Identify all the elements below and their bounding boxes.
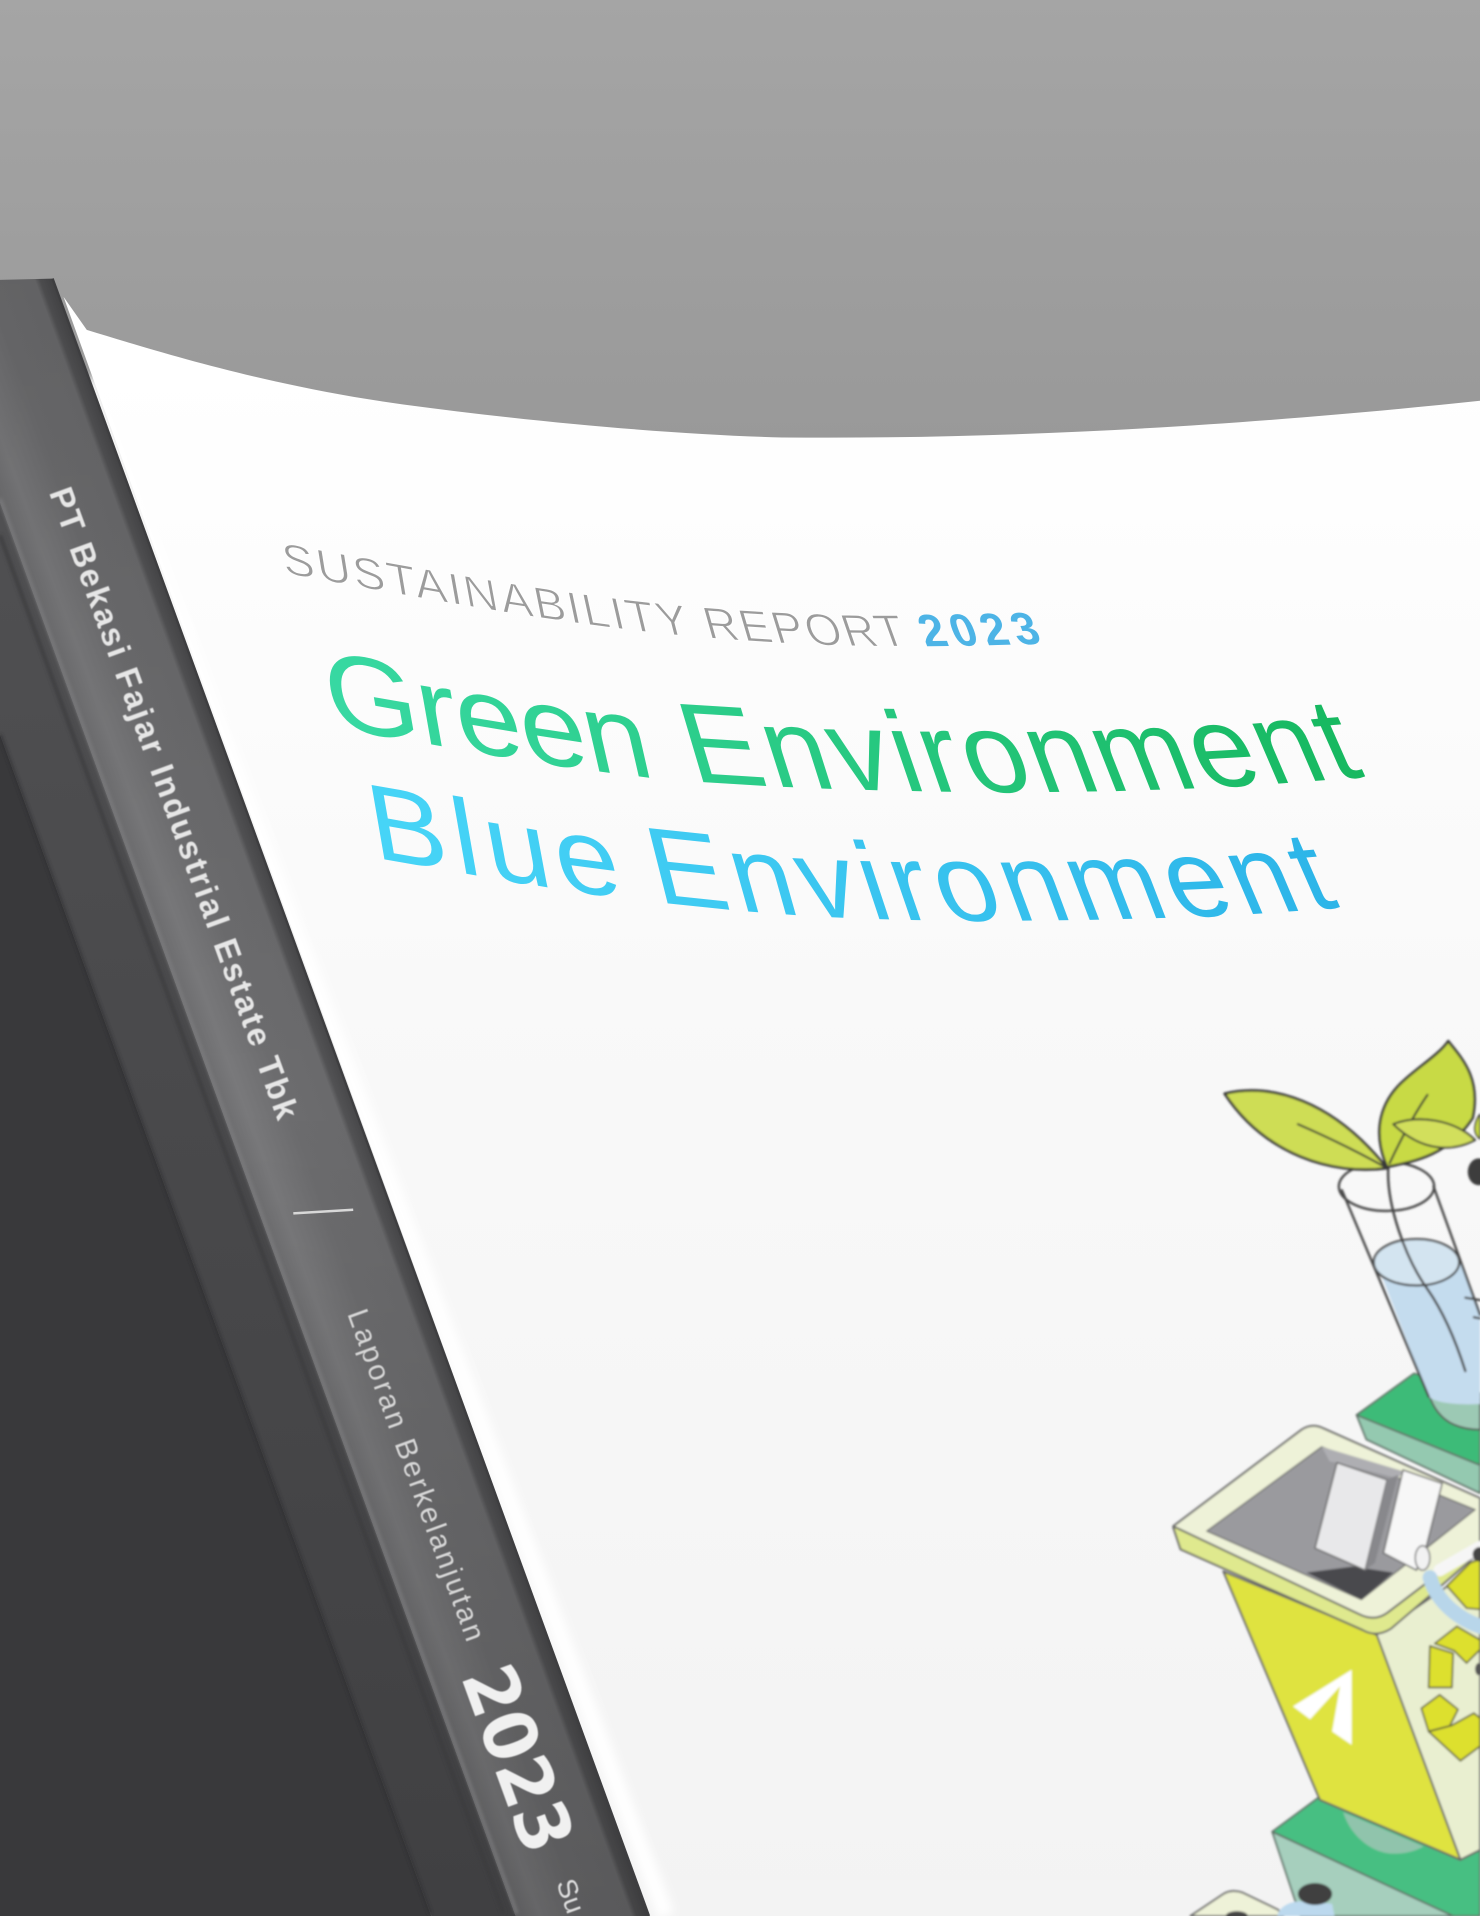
spine edge line bbox=[53, 279, 649, 1916]
paper sheet one bbox=[1315, 1463, 1387, 1570]
left leaf vein bbox=[1298, 1124, 1387, 1168]
right leaf bbox=[1379, 1041, 1475, 1167]
bottle body bbox=[1277, 1901, 1335, 1916]
subtitle: SUSTAINABILITY REPORT 2023 bbox=[285, 545, 1040, 646]
hinge far line bbox=[0, 734, 430, 1914]
spine year: 2023 bbox=[444, 1654, 590, 1864]
beaker ticks bbox=[1465, 1298, 1480, 1318]
beaker base bbox=[1429, 1393, 1480, 1430]
small lower bin bbox=[1190, 1883, 1335, 1916]
blue hose bbox=[1430, 1578, 1480, 1628]
upper platform side bbox=[1357, 1415, 1480, 1493]
water bbox=[1375, 1243, 1480, 1404]
paper fold bbox=[1365, 1475, 1398, 1570]
recycle arrow head bbox=[1421, 1695, 1458, 1731]
bin logo bbox=[1293, 1670, 1352, 1745]
small leaf bbox=[1393, 1119, 1475, 1148]
paper sheet two bbox=[1383, 1470, 1442, 1570]
recycle arrow lower bbox=[1429, 1713, 1480, 1761]
hinge ridge highlight bbox=[0, 499, 517, 1914]
spine divider bbox=[293, 1210, 353, 1213]
spine face bbox=[0, 279, 649, 1916]
bin interior bbox=[1207, 1447, 1475, 1600]
right leaf vein bbox=[1390, 1095, 1427, 1163]
recycling bin bbox=[1173, 1426, 1480, 1860]
upper platform bbox=[1357, 1373, 1480, 1493]
title line: green environment: Green Environment bbox=[330, 656, 1366, 794]
title line: blue environment: Blue Environment bbox=[372, 785, 1340, 922]
bottle cap bbox=[1473, 1547, 1480, 1562]
recycle symbol bbox=[1421, 1559, 1480, 1761]
bin rim bbox=[1173, 1426, 1480, 1618]
recycling illustration bbox=[1173, 1041, 1480, 1916]
cover title block bbox=[285, 545, 1366, 922]
hinge ridge shadow bbox=[0, 535, 504, 1914]
hinge band bbox=[0, 502, 516, 1916]
dark back cover bbox=[0, 734, 431, 1916]
recycle arrow top bbox=[1447, 1559, 1480, 1609]
plant stem bbox=[1388, 1167, 1465, 1371]
lower platform side bbox=[1272, 1832, 1453, 1916]
recycle arrow upper tail bbox=[1429, 1646, 1453, 1687]
upper platform top bbox=[1357, 1373, 1480, 1465]
lower platform bbox=[1272, 1797, 1480, 1916]
edge leaf bbox=[1475, 1114, 1480, 1139]
beaker mouth bbox=[1339, 1162, 1434, 1211]
tube knob bbox=[1415, 1546, 1430, 1570]
book spine bbox=[0, 279, 649, 1916]
spine shading bbox=[0, 279, 649, 1916]
bin rim lower lip bbox=[1173, 1521, 1480, 1634]
spine company name: PT Bekasi Fajar Industrial Estate Tbk bbox=[42, 482, 306, 1125]
beaker with plant bbox=[1225, 1041, 1480, 1430]
lower bin interior bbox=[1226, 1911, 1248, 1916]
bottle cap bbox=[1298, 1883, 1332, 1905]
dark spot bbox=[1468, 1158, 1480, 1185]
white tube bbox=[1440, 1547, 1480, 1570]
small dark dot bbox=[1475, 1663, 1480, 1675]
paper highlight beside spine bbox=[88, 379, 666, 1916]
bin front face bbox=[1223, 1571, 1460, 1860]
water surface bbox=[1374, 1239, 1459, 1285]
lower platform top bbox=[1272, 1797, 1480, 1916]
left leaf bbox=[1225, 1091, 1387, 1170]
bin interior shadow bbox=[1306, 1567, 1393, 1600]
lower bin rim bbox=[1190, 1891, 1283, 1916]
bin side face bbox=[1376, 1564, 1480, 1860]
spine report label: Laporan Berkelanjutan bbox=[341, 1305, 491, 1646]
bin inner wall band bbox=[1322, 1447, 1403, 1479]
recycle arrow upper band bbox=[1435, 1626, 1480, 1663]
teal bin base bbox=[1343, 1812, 1424, 1854]
beaker walls bbox=[1342, 1187, 1480, 1397]
